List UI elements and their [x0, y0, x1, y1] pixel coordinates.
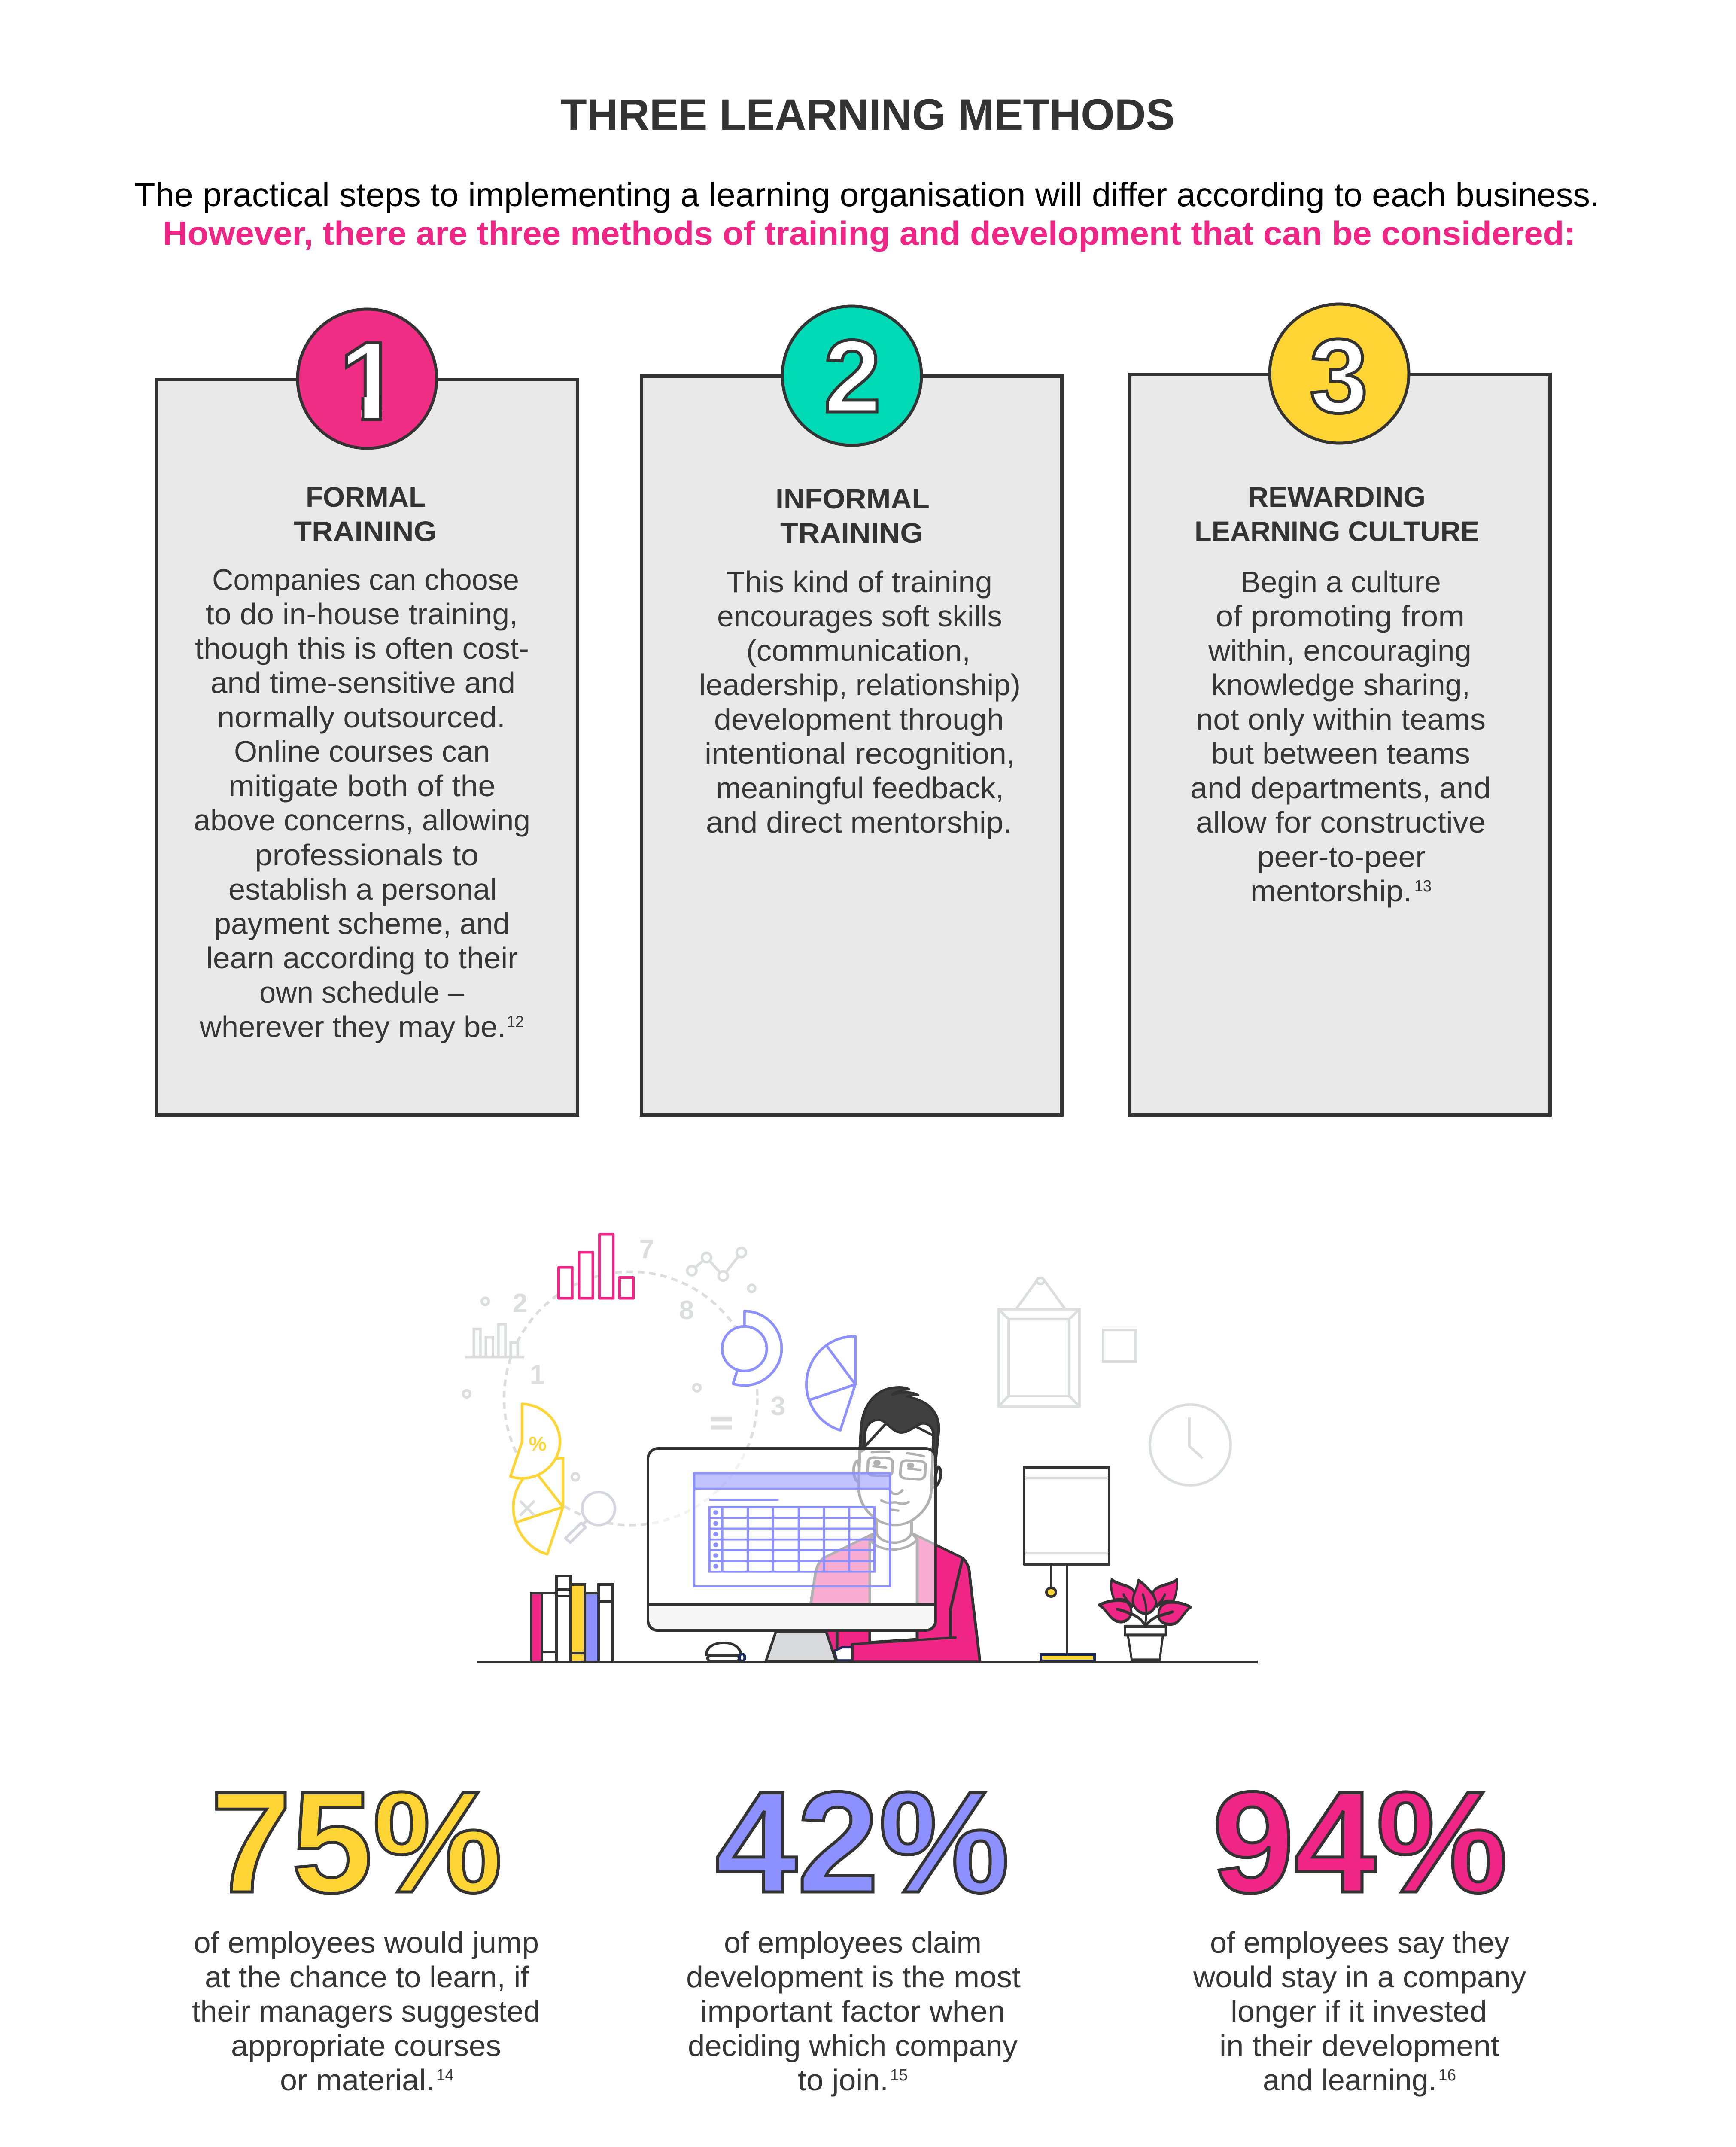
heading: rewarding learning culture: REWARDING: [1248, 481, 1426, 513]
statistic text: 75%: their managers suggested: [192, 1995, 540, 2028]
heading: formal training: [294, 481, 437, 547]
statistic: 94%: [1193, 1762, 1526, 2097]
neck: [876, 1518, 912, 1542]
heading: formal training: FORMAL: [306, 481, 426, 513]
intro text: The practical steps to implementing a learning organisation will differ according to each business.: [134, 176, 1599, 213]
statistic text: 42%: deciding which company: [688, 2029, 1018, 2062]
body text: formal training: above concerns, allowing: [194, 803, 530, 837]
jacket: [811, 1533, 980, 1662]
statistic text: 94%: of employees say they: [1210, 1926, 1509, 1959]
statistic text: 94%: and learning.: [1263, 2063, 1437, 2097]
body text: formal training: own schedule –: [259, 976, 464, 1009]
statistic text: 42%: to join.: [798, 2063, 888, 2097]
heading: informal training: INFORMAL: [775, 483, 930, 514]
heading: informal training: TRAINING: [780, 517, 923, 549]
person: [811, 1387, 980, 1662]
statistic text: 75%: of employees would jump: [194, 1926, 539, 1959]
floating numbers: 1: [530, 1360, 544, 1390]
body text: formal training: learn according to their: [206, 941, 518, 975]
floating numbers: 8: [679, 1295, 694, 1325]
body text: rewarding learning culture: peer-to-peer: [1257, 840, 1426, 873]
icon: number 2 badge: [782, 306, 921, 445]
icon: number 1 badge: [298, 309, 437, 448]
icon: number 1 badge: 1: [339, 319, 401, 444]
wall art: frame, square and clock: [999, 1278, 1231, 1485]
body text: informal training: encourages soft skills: [717, 599, 1002, 633]
body text: rewarding learning culture: but between teams: [1211, 737, 1470, 770]
statistic text: 75%: [192, 1926, 540, 2097]
shirt: [870, 1539, 917, 1642]
statistic text: 42%: development is the most: [686, 1960, 1021, 1994]
body text: formal training: wherever they may be.: [199, 1010, 506, 1043]
floating numbers: 7: [639, 1235, 654, 1264]
monitor frame and stand: [648, 1448, 936, 1661]
pie chart: yellow lower with magnifier: [511, 1404, 615, 1554]
statistic text: 42%: 15: [890, 2066, 908, 2084]
body text: formal training: Companies can choose: [212, 563, 519, 596]
intro text: [134, 176, 1599, 252]
body text: informal training: development through: [714, 702, 1004, 736]
body text: rewarding learning culture: Begin a culture: [1240, 565, 1441, 599]
intro text: However, there are three methods of training and development that can be considered:: [163, 214, 1575, 252]
body text: rewarding learning culture: and departments, and: [1190, 771, 1491, 805]
body text: informal training: and direct mentorship.: [706, 806, 1012, 839]
body text: informal training: [699, 565, 1021, 839]
body text: informal training: intentional recognition,: [705, 737, 1015, 770]
heading: informal training: [775, 483, 930, 549]
body text: rewarding learning culture: 13: [1414, 877, 1432, 895]
spreadsheet on screen: [694, 1473, 890, 1586]
lamp: [1024, 1467, 1109, 1661]
ears: [854, 1460, 941, 1487]
body text: formal training: professionals to: [255, 838, 479, 872]
statistic text: 94%: [1193, 1926, 1526, 2097]
statistic: 75%: 75%: [210, 1762, 502, 1922]
facial features: [867, 1451, 926, 1511]
bar chart: pink: [559, 1234, 633, 1298]
heading: rewarding learning culture: LEARNING CULTURE: [1195, 515, 1479, 547]
pie chart: purple: [806, 1336, 855, 1430]
percent sign on yellow pie: %: [529, 1432, 546, 1455]
statistic text: 75%: or material.: [280, 2063, 435, 2097]
computer mouse: [706, 1643, 745, 1661]
donut chart: purple: [722, 1311, 781, 1386]
floating numbers: 2: [513, 1289, 527, 1318]
panel: rewarding learning culture: [1130, 304, 1550, 1115]
heading: rewarding learning culture: [1195, 481, 1479, 547]
floating numbers: [513, 1235, 785, 1421]
body text: informal training: meaningful feedback,: [716, 771, 1004, 805]
body text: rewarding learning culture: knowledge sharing,: [1211, 668, 1470, 702]
illustration: man at desktop computer: [463, 1234, 1258, 1663]
body text: rewarding learning culture: not only within teams: [1196, 702, 1486, 736]
body text: formal training: to do in-house training,: [206, 597, 518, 631]
body text: informal training: leadership, relationship): [699, 668, 1021, 702]
icon: number 3 badge: [1270, 304, 1409, 443]
body text: informal training: (communication,: [746, 634, 970, 667]
hair: [860, 1387, 939, 1460]
statistic text: 75%: 14: [436, 2066, 454, 2084]
statistic text: 94%: would stay in a company: [1193, 1960, 1526, 1994]
body text: formal training: Online courses can: [234, 735, 490, 768]
body text: formal training: [194, 563, 530, 1043]
body text: formal training: though this is often cost-: [195, 632, 529, 665]
statistic: 42%: 42%: [715, 1762, 1009, 1922]
body text: formal training: payment scheme, and: [214, 907, 510, 940]
face: [859, 1415, 933, 1525]
statistic text: 75%: at the chance to learn, if: [205, 1960, 529, 1994]
statistic text: 94%: 16: [1438, 2066, 1456, 2084]
potted plant: [1099, 1579, 1191, 1660]
statistic text: 42%: of employees claim: [724, 1926, 982, 1959]
statistic: 42%: [686, 1762, 1021, 2097]
panel: formal training: [157, 309, 578, 1115]
dashed orbit and floating grey marks: [463, 1248, 757, 1525]
sleeve and hand: [837, 1558, 963, 1647]
statistic text: 94%: in their development: [1219, 2029, 1499, 2062]
floating numbers: 3: [771, 1392, 785, 1421]
body text: rewarding learning culture: mentorship.: [1250, 874, 1412, 908]
monitor screen glass: [648, 1448, 936, 1604]
statistic text: 94%: longer if it invested: [1231, 1995, 1487, 2028]
body text: formal training: normally outsourced.: [217, 700, 505, 734]
body text: formal training: establish a personal: [228, 873, 497, 906]
body text: rewarding learning culture: allow for constructive: [1196, 806, 1486, 839]
body text: rewarding learning culture: of promoting from: [1216, 599, 1465, 633]
body text: informal training: This kind of training: [726, 565, 992, 599]
statistic text: 42%: [686, 1926, 1021, 2097]
title: THREE LEARNING METHODS: [560, 90, 1175, 139]
icon: number 2 badge: 2: [824, 319, 881, 434]
body text: rewarding learning culture: [1190, 565, 1491, 908]
books: [531, 1576, 613, 1662]
desk line: [477, 1661, 1258, 1663]
body text: rewarding learning culture: within, encouraging: [1208, 634, 1471, 667]
statistic text: 42%: important factor when: [700, 1995, 1005, 2028]
statistic: 75%: [192, 1762, 540, 2097]
body text: formal training: 12: [507, 1013, 524, 1031]
icon: number 3 badge: 3: [1310, 317, 1368, 435]
panel: informal training: [641, 306, 1062, 1115]
body text: formal training: and time-sensitive and: [210, 666, 515, 699]
statistic: 94%: 94%: [1212, 1762, 1508, 1922]
statistic text: 75%: appropriate courses: [231, 2029, 501, 2062]
body text: formal training: mitigate both of the: [228, 769, 496, 803]
heading: formal training: TRAINING: [294, 515, 437, 547]
